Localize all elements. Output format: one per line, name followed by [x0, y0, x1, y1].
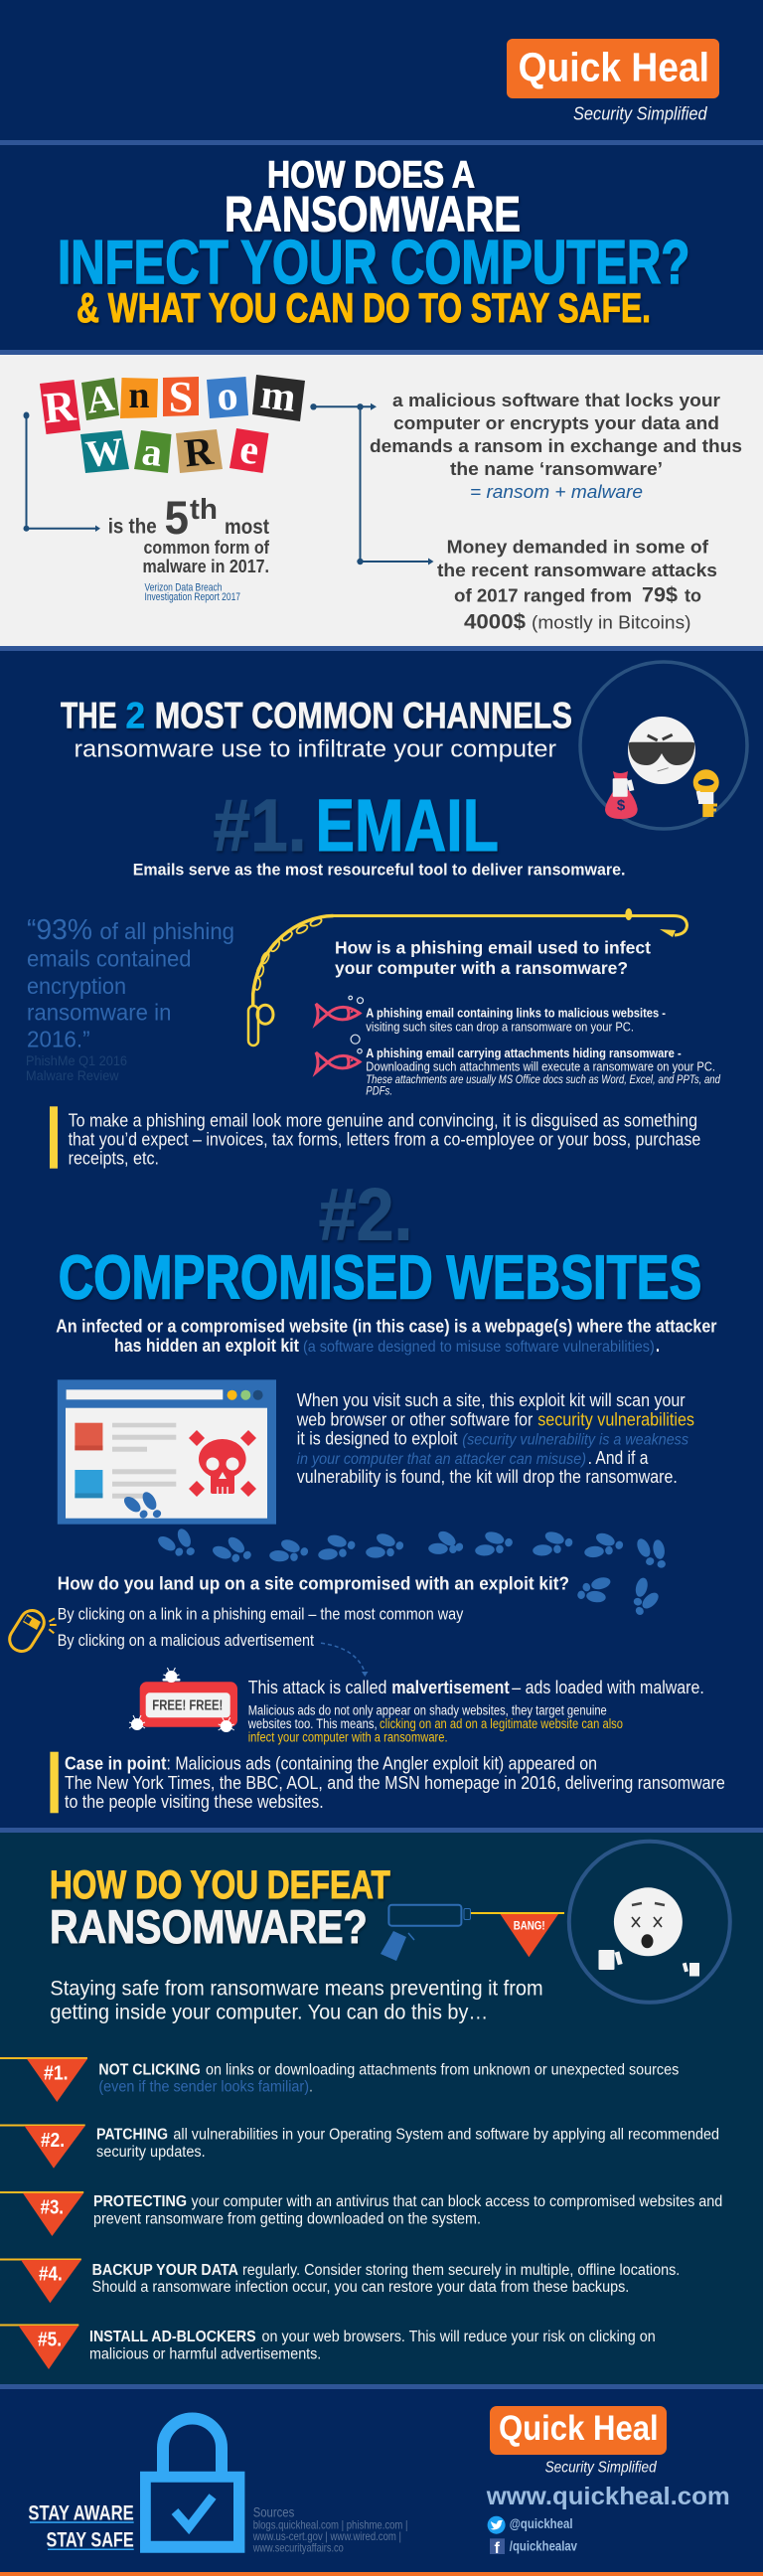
heading: how do you defeat ransomware	[50, 1863, 390, 1953]
text: compromised website intro: (a software designed to misuse software vulnerabilities)	[303, 1339, 655, 1356]
heading: how do you defeat ransomware: HOW DO YOU DEFEAT	[50, 1863, 390, 1907]
text: how phishing is used: How is a phishing email used to infect	[335, 937, 651, 957]
text: phishing email types	[366, 1005, 720, 1097]
social links: @quickheal	[510, 2516, 572, 2531]
text: malvertisement: Malicious ads do not only appear on shady websites, they target genuine	[248, 1703, 607, 1718]
connector: right arrows	[310, 403, 433, 564]
logo: Quick Heal header: Quick Heal	[519, 45, 709, 90]
quote: 93 percent	[26, 914, 234, 1083]
ransomware letter tiles	[40, 372, 305, 476]
social links	[488, 2516, 577, 2557]
text: money demanded	[437, 538, 717, 634]
ransomware letter tiles: A	[84, 377, 117, 422]
text: phishing email types: Downloading such attachments will execute a ransomware on your PC.	[366, 1059, 715, 1074]
quote: 93 percent: Malware Review	[26, 1067, 119, 1083]
callout: case in point	[50, 1752, 725, 1813]
text: 5th most common form	[108, 491, 270, 603]
text: sources: Sources	[253, 2505, 295, 2520]
text: sources: blogs.quickheal.com | phishme.com |	[253, 2517, 407, 2531]
list item: #4 backup	[0, 2258, 680, 2303]
arrow: dashed to malvertisement	[321, 1643, 368, 1677]
list item: #2 patching	[0, 2125, 719, 2169]
connector: left arrow	[24, 411, 100, 532]
quote: 93 percent: emails contained	[27, 946, 191, 972]
text: phishing email types: PDFs.	[366, 1085, 392, 1097]
callout: case in point: Case in point	[65, 1754, 167, 1774]
text: ransomware definition	[370, 391, 742, 502]
list item: #3 protecting	[0, 2191, 722, 2236]
text: malvertisement: clicking on an ad on a legitimate website can also	[380, 1716, 623, 1731]
text: money demanded: 79$	[642, 584, 678, 607]
heading: #2 compromised websites: #2.	[319, 1174, 412, 1256]
ransomware letter tiles: a	[140, 428, 164, 475]
icon: defeated ransomware face	[569, 1842, 730, 2003]
list item: #1 not clicking: (even if the sender looks familiar)	[98, 2078, 309, 2095]
text: ways of landing on site: By clicking on a malicious advertisement	[58, 1632, 314, 1650]
heading: 2 most common channels: MOST COMMON CHANNELS	[155, 695, 572, 735]
text: exploit kit explanation: it is designed to exploit	[297, 1429, 457, 1449]
text: money demanded: of 2017 ranged from	[454, 586, 632, 606]
illustration: infected browser window	[58, 1379, 276, 1525]
text: 5th most common form: common form of	[143, 538, 270, 558]
callout: case in point: to the people visiting these websites.	[65, 1792, 324, 1812]
list item: #2 patching: all vulnerabilities in your Operating System and software by applying all recommended	[173, 2127, 719, 2144]
ransomware letter tiles: n	[128, 375, 150, 416]
ransomware letter tiles: o	[216, 373, 239, 420]
quote: 93 percent: ransomware in	[27, 1000, 171, 1026]
text: money demanded: the recent ransomware attacks	[437, 561, 717, 580]
list item: #5 ad blockers: INSTALL AD-BLOCKERS	[89, 2329, 256, 2345]
text: malvertisement: – ads loaded with malware.	[512, 1677, 704, 1697]
list item: #4 backup: #4.	[39, 2263, 63, 2285]
logo: Quick Heal footer: Security Simplified	[545, 2460, 658, 2477]
text: malvertisement: This attack is called	[248, 1677, 386, 1697]
text: staying safe intro: Staying safe from ransomware means preventing it from	[50, 1977, 543, 2000]
text: ransomware definition: a malicious software that locks your	[392, 391, 720, 410]
title	[58, 155, 689, 331]
list item: #1 not clicking: #1.	[44, 2063, 69, 2085]
text: ransomware definition: demands a ransom in exchange and thus	[370, 436, 742, 456]
text: staying safe intro: getting inside your computer. You can do this by…	[50, 2002, 488, 2024]
icon: masked hacker with money bag and key: $	[617, 797, 626, 814]
text: sources: www.us-cert.gov | www.wired.com |	[252, 2529, 401, 2543]
icon: free free malicious ad	[129, 1668, 237, 1731]
icon: fishing rod	[248, 908, 687, 1046]
callout: phishing disguise: To make a phishing email look more genuine and convincing, it is disguised as something	[69, 1110, 697, 1130]
text: money demanded: 4000$	[464, 611, 526, 634]
callout: phishing disguise: that you’d expect – invoices, tax forms, letters from a co-employee or your boss, purchase	[69, 1130, 700, 1150]
ransomware letter tiles: e	[237, 426, 261, 474]
text: exploit kit explanation: web browser or other software for	[296, 1409, 533, 1429]
text: how phishing is used	[335, 937, 651, 978]
quote: 93 percent: of all phishing	[99, 918, 234, 944]
heading: #1 email	[213, 784, 499, 867]
icon: skull	[189, 1430, 256, 1497]
ransomware letter tiles: W	[83, 430, 125, 476]
icon: gun with bang flag: BANG!	[514, 1921, 545, 1933]
text: email intro: Emails serve as the most resourceful tool to deliver ransomware.	[133, 862, 625, 880]
text: ransomware definition: computer or encrypts your data and	[393, 413, 719, 433]
list item: #2 patching: PATCHING	[96, 2127, 168, 2144]
text: malvertisement: infect your computer with a ransomware.	[248, 1729, 448, 1744]
text: website: www.quickheal.com	[486, 2483, 730, 2510]
text: ransomware definition: = ransom + malware	[470, 482, 643, 502]
list item: #5 ad blockers: on your web browsers. This will reduce your risk on clicking on	[262, 2329, 656, 2345]
text: ways of landing on site	[58, 1605, 464, 1650]
list item: #1 not clicking: on links or downloading attachments from unknown or unexpected sources	[206, 2061, 680, 2078]
list item: #5 ad blockers: #5.	[38, 2330, 62, 2351]
title: RANSOMWARE	[225, 187, 521, 242]
icon: padlock with check	[140, 2419, 244, 2553]
text: sources	[252, 2505, 407, 2555]
text: phishing email types: visiting such sites can drop a ransomware on your PC.	[366, 1020, 634, 1035]
list item: #1 not clicking: .	[310, 2078, 312, 2095]
text: sources: www.securityaffairs.co	[252, 2541, 344, 2555]
text: 5th most common form: is the	[108, 516, 157, 539]
text: stay aware stay safe	[28, 2502, 134, 2552]
quote: 93 percent: “93%	[27, 914, 92, 946]
text: 5th most common form: th	[190, 494, 218, 526]
quote: 93 percent: PhishMe Q1 2016	[26, 1052, 127, 1068]
quote: 93 percent: encryption	[27, 973, 126, 999]
ransomware letter tiles: S	[169, 373, 193, 421]
text: ransomware definition: the name ‘ransomware’	[450, 459, 663, 479]
text: compromised website intro	[56, 1317, 717, 1356]
text: malvertisement: websites too. This means,	[247, 1716, 378, 1731]
ransomware letter tiles: R	[42, 381, 79, 433]
ransomware letter tiles: m	[258, 372, 298, 421]
text: money demanded: Money demanded in some of	[447, 538, 709, 558]
ransomware letter tiles: R	[182, 428, 217, 475]
icon: free free malicious ad: FREE! FREE!	[152, 1697, 223, 1714]
quote: 93 percent: 2016.”	[27, 1026, 90, 1051]
list item: #4 backup: Should a ransomware infection occur, you can restore your data from these backups.	[92, 2279, 629, 2296]
text: money demanded: (mostly in Bitcoins)	[532, 613, 691, 633]
list item: #3 protecting: your computer with an antivirus that can block access to compromised websites and	[191, 2193, 722, 2210]
logo: Quick Heal footer: Quick Heal	[499, 2409, 659, 2448]
text: ways of landing on site: By clicking on a link in a phishing email – the most common way	[58, 1605, 464, 1623]
callout: phishing disguise: receipts, etc.	[69, 1149, 159, 1169]
text: stay aware stay safe: STAY AWARE	[28, 2502, 134, 2525]
list item: #1 not clicking: NOT CLICKING	[98, 2061, 201, 2078]
text: 5th most common form: 5	[165, 491, 189, 544]
text: stay aware stay safe: STAY SAFE	[46, 2529, 134, 2552]
text: exploit kit explanation: security vulnerabilities	[537, 1409, 694, 1429]
heading: how do you defeat ransomware: RANSOMWARE?	[50, 1900, 368, 1953]
icon: masked hacker with money bag and key	[580, 662, 747, 829]
text: phishing email types: A phishing email containing links to malicious websites -	[366, 1005, 666, 1020]
title: HOW DOES A	[267, 155, 475, 197]
text: exploit kit explanation	[296, 1390, 694, 1487]
social links: /quickhealav	[510, 2539, 577, 2554]
list item: #4 backup: BACKUP YOUR DATA	[92, 2262, 238, 2279]
list item: #3 protecting: PROTECTING	[93, 2193, 187, 2210]
text: phishing email types: A phishing email carrying attachments hiding ransomware -	[366, 1046, 682, 1060]
list item: #3 protecting: #3.	[41, 2197, 64, 2219]
list item: #4 backup: regularly. Consider storing them securely in multiple, offline locations.	[242, 2262, 680, 2279]
icon: gun with bang flag	[381, 1905, 564, 1961]
text: 5th most common form: Verizon Data Breach	[145, 581, 223, 593]
text: 5th most common form: Investigation Report 2017	[145, 591, 240, 603]
logo: Quick Heal footer	[490, 2406, 667, 2477]
text: exploit kit explanation: (security vulnerability is a weakness	[462, 1432, 688, 1449]
callout: phishing disguise	[50, 1106, 700, 1169]
callout: case in point: : Malicious ads (containing the Angler exploit kit) appeared on	[167, 1754, 597, 1774]
text: 5th most common form: malware in 2017.	[143, 557, 269, 576]
heading: 2 most common channels: ransomware use to infiltrate your computer	[74, 736, 556, 763]
text: compromised website intro: .	[656, 1336, 660, 1356]
text: compromised website intro: has hidden an exploit kit	[114, 1336, 299, 1356]
icon: computer mouse	[5, 1606, 57, 1656]
icon: footprints trail	[156, 1527, 668, 1618]
list item: #2 patching: #2.	[41, 2130, 65, 2152]
heading: 2 most common channels: THE	[61, 695, 117, 735]
logo: Quick Heal header: Security Simplified	[573, 104, 707, 124]
text: exploit kit explanation: . And if a	[588, 1448, 649, 1468]
heading: how do you land up: How do you land up on a site compromised with an exploit kit?	[58, 1572, 569, 1593]
heading: #1 email: EMAIL	[316, 784, 499, 867]
list item: #1 not clicking	[0, 2057, 680, 2102]
text: money demanded: to	[685, 586, 701, 606]
text: 5th most common form: most	[225, 516, 269, 539]
icon: fish with bubbles	[316, 996, 364, 1072]
list item: #3 protecting: prevent ransomware from getting downloaded on the system.	[93, 2210, 481, 2227]
heading: #2 compromised websites	[59, 1174, 701, 1313]
text: staying safe intro	[50, 1977, 543, 2024]
text: exploit kit explanation: in your computer that an attacker can misuse)	[297, 1451, 586, 1468]
text: malvertisement	[247, 1677, 704, 1744]
text: how phishing is used: your computer with a ransomware?	[335, 958, 628, 978]
list item: #5 ad blockers	[0, 2324, 656, 2369]
text: exploit kit explanation: When you visit such a site, this exploit kit will scan your	[297, 1390, 686, 1410]
text: exploit kit explanation: vulnerability is found, the kit will drop the ransomware.	[297, 1467, 678, 1487]
heading: #1 email: #1.	[213, 784, 306, 867]
heading: 2 most common channels: 2	[125, 695, 145, 735]
list item: #2 patching: security updates.	[96, 2144, 206, 2161]
heading: 2 most common channels	[61, 695, 572, 763]
list item: #5 ad blockers: malicious or harmful advertisements.	[89, 2345, 321, 2362]
text: malvertisement: malvertisement	[391, 1677, 510, 1697]
logo: Quick Heal header	[507, 39, 719, 124]
social links: f	[495, 2540, 501, 2557]
